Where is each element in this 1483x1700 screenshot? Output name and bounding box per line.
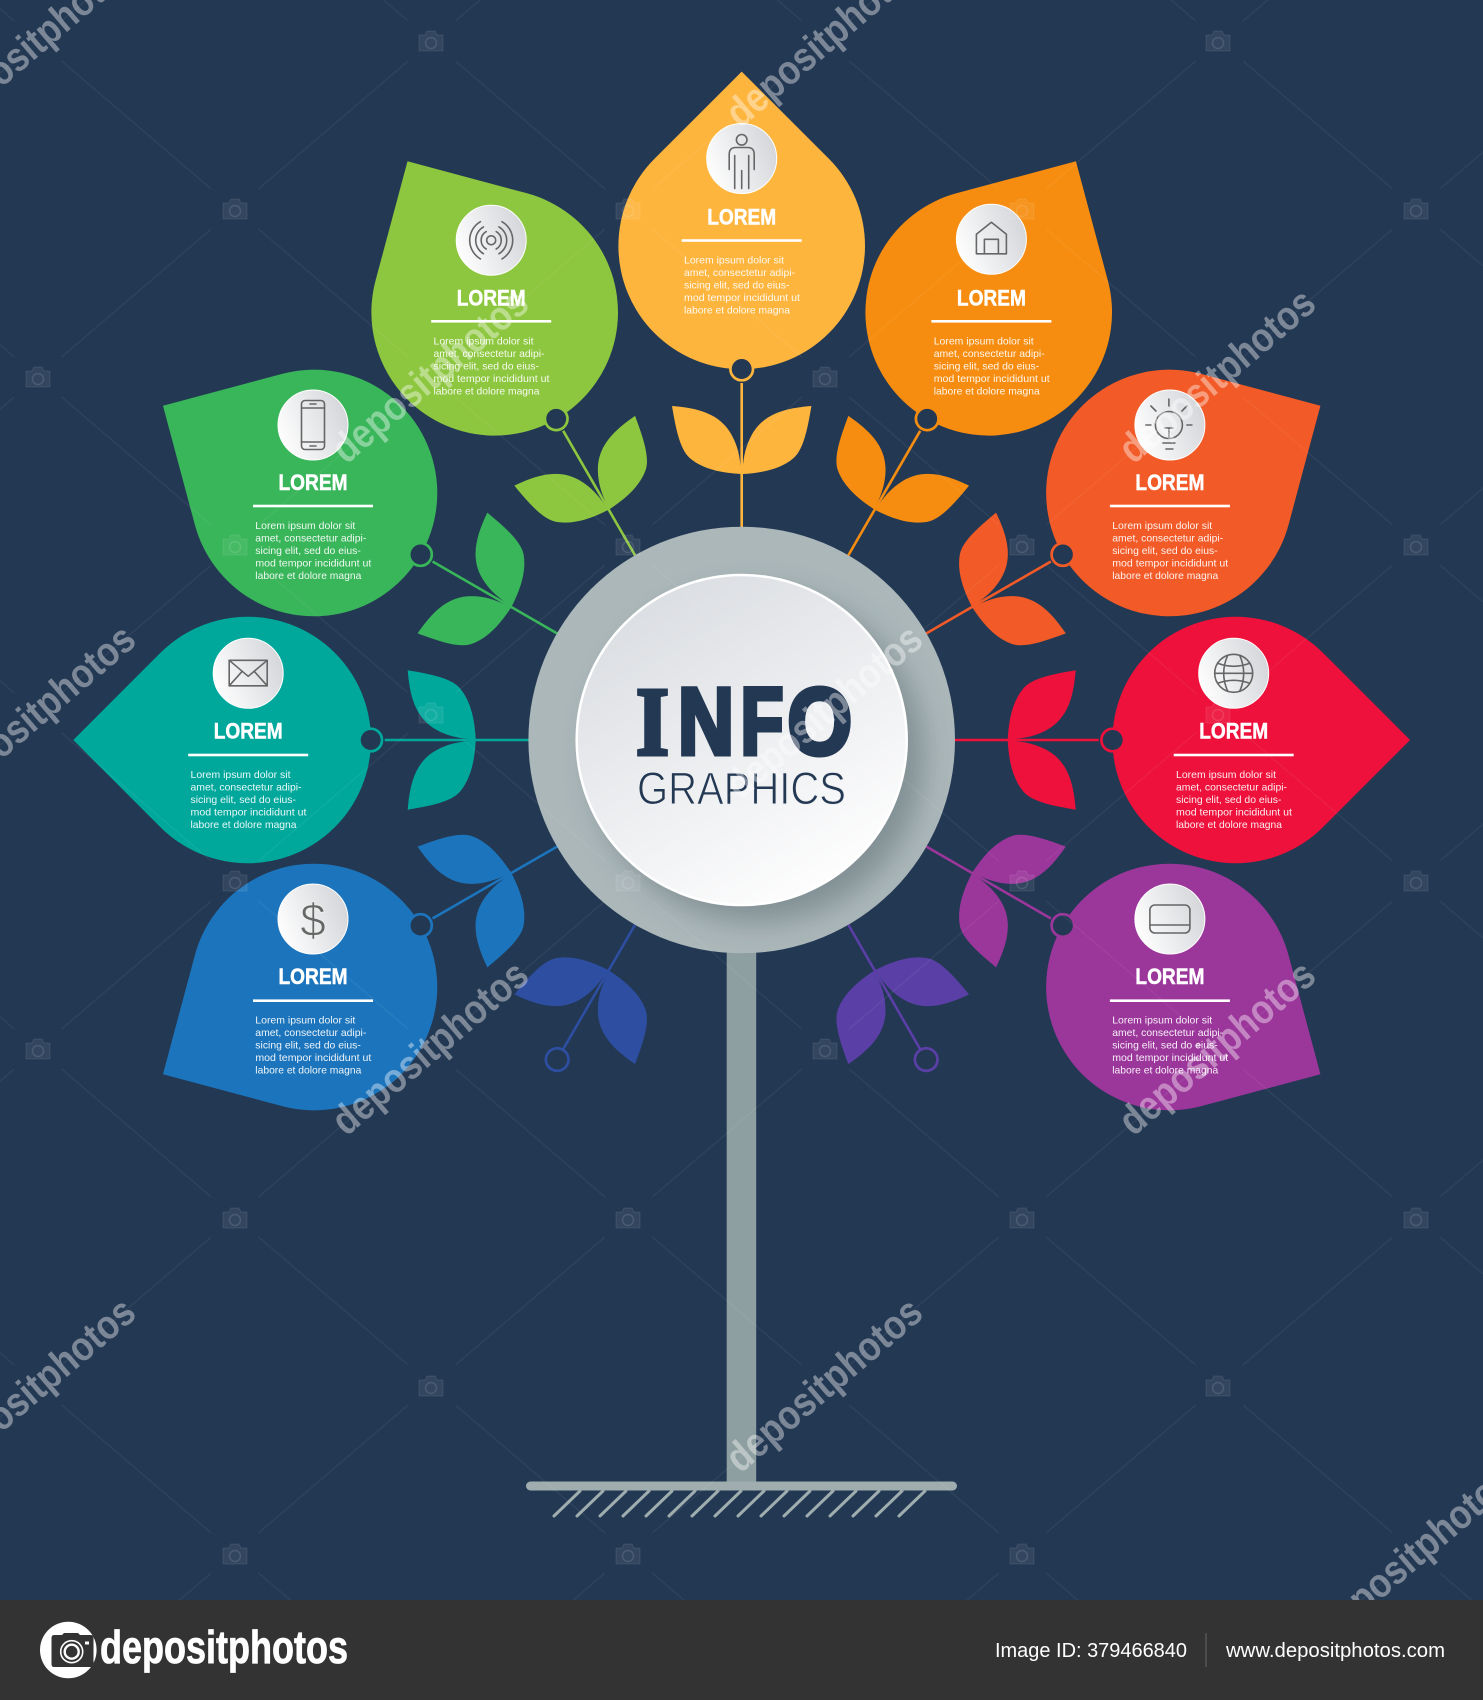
footer website: www.depositphotos.com	[1225, 1640, 1445, 1662]
title: INFO: F	[740, 669, 784, 775]
body text: sicing elit, sed do eius-	[934, 360, 1040, 372]
panel: light green petal, wireless	[301, 100, 663, 481]
body text: labore et dolore magna	[934, 385, 1040, 397]
icon: dollar: $	[300, 894, 326, 946]
body text	[255, 1014, 371, 1076]
body text: labore et dolore magna	[255, 1064, 361, 1076]
footer image id: Image ID: 379466840	[995, 1640, 1187, 1662]
body text: amet, consectetur adipi-	[934, 348, 1045, 360]
panel: green petal, phone	[101, 299, 482, 661]
branch: light green	[503, 396, 696, 591]
body text	[934, 335, 1050, 397]
title: INFO	[636, 668, 852, 776]
panel: yellow petal, person	[618, 72, 865, 380]
branch: purple	[890, 786, 1086, 979]
body text: mod tempor incididunt ut	[1112, 558, 1228, 570]
body text: sicing elit, sed do eius-	[255, 1040, 361, 1052]
title: GRAPHICS: GRAPHICS	[637, 763, 846, 814]
title: INFO: N	[678, 669, 734, 775]
branch: orange-red	[890, 501, 1086, 694]
body text: amet, consectetur adipi-	[190, 781, 302, 793]
icon: person	[707, 124, 777, 194]
body text: mod tempor incididunt ut	[684, 292, 800, 304]
body text: labore et dolore magna	[255, 570, 361, 582]
body text: sicing elit, sed do eius-	[1176, 794, 1282, 806]
footer logo wordmark: depositphotos	[100, 1621, 348, 1673]
icon: basketball	[1199, 638, 1269, 708]
body text: mod tempor incididunt ut	[190, 806, 307, 818]
body text	[1112, 520, 1228, 582]
watermark text: depositphotos	[716, 615, 931, 808]
heading: LOREM	[1135, 964, 1204, 989]
body text: amet, consectetur adipi-	[1176, 781, 1287, 793]
body text: amet, consectetur adipi-	[255, 532, 367, 544]
icon: house	[956, 204, 1026, 274]
watermark text: depositphotos	[716, 1288, 931, 1481]
icon: dollar	[278, 884, 348, 954]
body text: sicing elit, sed do eius-	[190, 794, 296, 806]
watermark text: depositphotos	[1109, 951, 1324, 1144]
body text: Lorem ipsum dolor sit	[1112, 520, 1212, 532]
body text: Lorem ipsum dolor sit	[255, 1014, 355, 1026]
body text: labore et dolore magna	[1112, 570, 1218, 582]
panel: teal petal, envelope	[73, 617, 382, 863]
watermark text: depositphotos	[322, 951, 537, 1144]
watermark text: depositphotos	[322, 279, 537, 472]
body text: labore et dolore magna	[190, 819, 297, 831]
body text: Lorem ipsum dolor sit	[1112, 1014, 1212, 1026]
hub: grey ring	[528, 527, 955, 953]
heading: LOREM	[278, 964, 348, 989]
heading: LOREM	[1135, 470, 1204, 495]
branch: violet with empty node	[787, 889, 992, 1104]
ground line	[526, 1482, 957, 1490]
panel: purple petal, tablet	[1001, 819, 1382, 1181]
panel: red petal, globe ball	[1101, 617, 1410, 863]
body text: sicing elit, sed do eius-	[434, 360, 539, 372]
heading: LOREM	[707, 204, 776, 230]
body text: sicing elit, sed do eius-	[1112, 1040, 1218, 1052]
body text	[255, 520, 371, 582]
panel: orange petal, house	[820, 100, 1183, 481]
footer logo icon	[40, 1622, 97, 1678]
body text: labore et dolore magna	[1112, 1064, 1218, 1076]
body text	[1176, 769, 1292, 831]
icon: envelope	[213, 638, 283, 708]
body text: mod tempor incididunt ut	[255, 1052, 371, 1064]
heading: LOREM	[1199, 718, 1268, 743]
body text: amet, consectetur adipi-	[434, 348, 545, 360]
body text: Lorem ipsum dolor sit	[434, 335, 534, 347]
branch: yellow	[672, 383, 811, 528]
icon: smartphone	[278, 390, 348, 460]
title: INFO: O	[788, 669, 852, 775]
body text	[190, 769, 307, 831]
branch: red	[954, 670, 1099, 810]
body text: mod tempor incididunt ut	[1112, 1052, 1228, 1064]
body text	[684, 254, 800, 316]
panel: orange-red petal, light bulb	[1001, 299, 1382, 661]
body text: amet, consectetur adipi-	[684, 267, 795, 279]
heading: LOREM	[957, 285, 1026, 310]
body text: Lorem ipsum dolor sit	[934, 335, 1034, 347]
branch: orange	[787, 396, 981, 591]
icon: light bulb	[1135, 390, 1205, 460]
title: INFO: I	[636, 668, 669, 776]
body text: amet, consectetur adipi-	[255, 1027, 367, 1039]
body text: labore et dolore magna	[1176, 819, 1282, 831]
body text: sicing elit, sed do eius-	[1112, 545, 1218, 557]
body text: labore et dolore magna	[434, 385, 540, 397]
branch: blue	[398, 786, 593, 979]
trunk pole	[727, 940, 756, 1485]
body text: amet, consectetur adipi-	[1112, 1027, 1224, 1039]
body text	[1112, 1014, 1228, 1076]
body text: sicing elit, sed do eius-	[684, 280, 790, 292]
body text: Lorem ipsum dolor sit	[255, 520, 355, 532]
icon: wireless signal	[456, 205, 526, 275]
panel: blue petal, dollar	[101, 819, 482, 1181]
watermark text: depositphotos	[1109, 279, 1324, 472]
heading: LOREM	[214, 718, 283, 743]
ground hatching	[554, 1491, 925, 1516]
body text: amet, consectetur adipi-	[1112, 532, 1224, 544]
body text: mod tempor incididunt ut	[434, 373, 550, 385]
branch: teal	[385, 670, 530, 810]
heading: LOREM	[278, 470, 348, 495]
body text: Lorem ipsum dolor sit	[190, 769, 291, 781]
body text: mod tempor incididunt ut	[1176, 806, 1292, 818]
body text: labore et dolore magna	[684, 304, 790, 316]
body text: mod tempor incididunt ut	[255, 558, 371, 570]
body text: sicing elit, sed do eius-	[255, 545, 361, 557]
body text: Lorem ipsum dolor sit	[684, 254, 784, 266]
heading: LOREM	[457, 285, 526, 310]
body text	[434, 335, 550, 397]
body text: mod tempor incididunt ut	[934, 373, 1050, 385]
branch: indigo with empty node	[491, 889, 696, 1104]
body text: Lorem ipsum dolor sit	[1176, 769, 1276, 781]
hub: white disc with shadow	[577, 575, 907, 905]
branch: green	[398, 501, 593, 694]
footer band	[0, 1600, 1483, 1700]
icon: tablet	[1135, 884, 1205, 954]
